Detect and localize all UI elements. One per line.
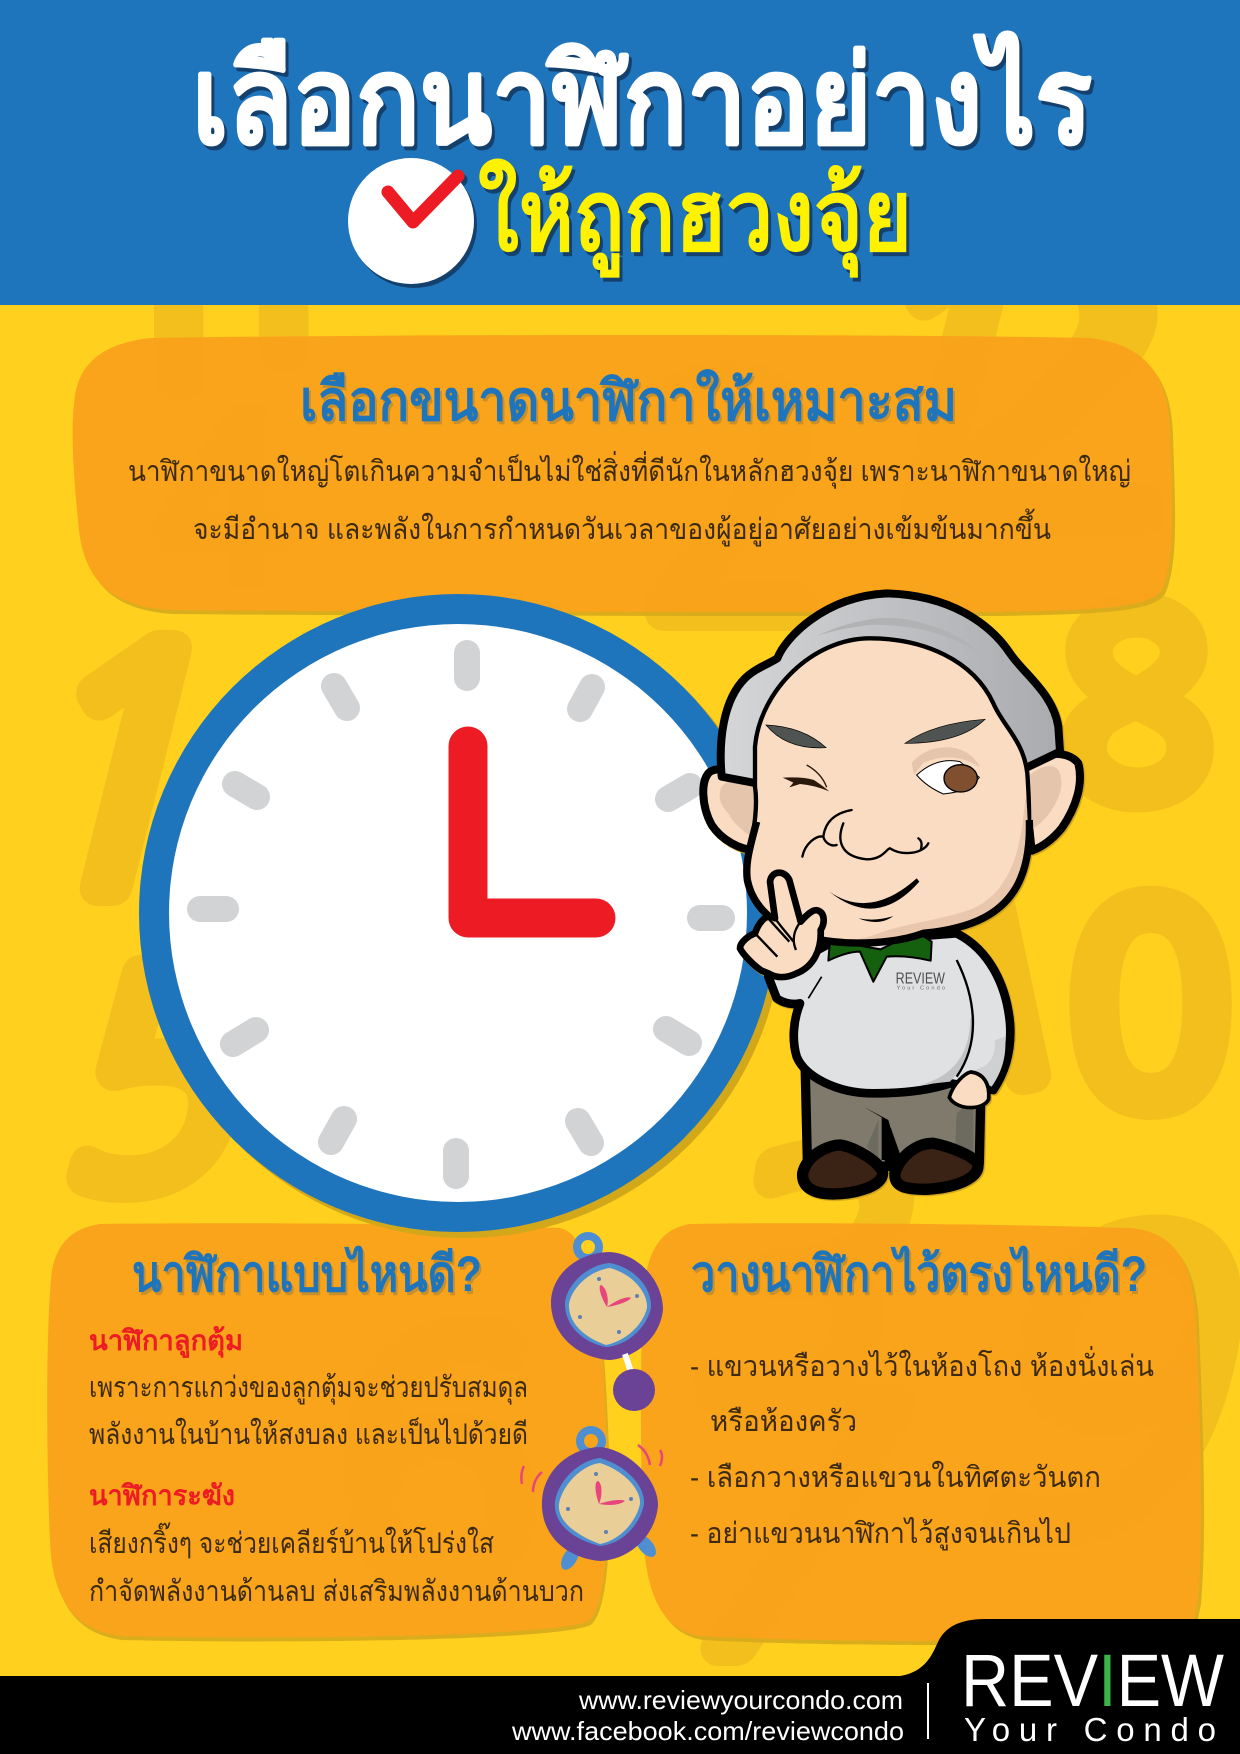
eyebrows	[766, 719, 985, 748]
background numerals: 2	[640, 342, 834, 662]
footer website links: www.reviewyourcondo.com	[578, 1685, 903, 1715]
list: placement tips: - แขวนหรือวางไว้ในห้องโถง ห้องนั่งเล่น	[690, 1346, 1154, 1383]
list: placement tips: - เลือกวางหรือแขวนในทิศตะวันตก	[690, 1460, 1101, 1494]
collar	[828, 932, 932, 982]
title line one: เลือกนาฬิกาอย่างไร	[192, 32, 1092, 169]
text block: choose size	[128, 451, 1131, 547]
list: placement tips: หรือห้องครัว	[710, 1406, 857, 1438]
footer website links: www.facebook.com/reviewcondo	[511, 1716, 904, 1746]
clock ticks	[200, 653, 722, 1176]
clock hands	[468, 746, 596, 918]
panel: where to place	[641, 1223, 1201, 1641]
nose	[802, 810, 928, 859]
background numerals: 9	[960, 1188, 1240, 1588]
background numerals: 7	[660, 1359, 904, 1699]
shoes	[803, 1143, 978, 1194]
background numerals: 1	[0, 608, 195, 938]
logo: Review Your Condo: Your Condo	[964, 1711, 1216, 1748]
icon: clock check mark	[348, 158, 474, 284]
background numerals: 6	[335, 1294, 541, 1634]
right ear	[1023, 754, 1080, 851]
panel: choose size	[73, 335, 1172, 612]
chin outline	[747, 820, 1029, 943]
face	[747, 638, 1029, 943]
hair	[721, 593, 1060, 783]
icon: pendulum wall clock	[551, 1236, 663, 1411]
background numerals: 2	[890, 204, 1193, 574]
text block: choose size: จะมีอำนาจ และพลังในการกำหนดวันเวลาของผู้อยู่อาศัยอย่างเข้มข้นมากขึ้น	[193, 508, 1051, 547]
background numerals: 1	[907, 864, 1100, 1129]
background numerals: 3	[680, 1118, 907, 1448]
resting hand	[949, 1072, 989, 1108]
background numerals: 1	[85, 146, 255, 426]
background numerals: 5	[50, 937, 249, 1227]
pointing hand	[740, 873, 824, 977]
legs	[805, 1060, 981, 1167]
heading: where to place: วางนาฬิกาไว้ตรงไหนดี?	[691, 1245, 1147, 1302]
icon: alarm clock	[521, 1430, 662, 1573]
mouth	[829, 878, 919, 922]
panel: which clock	[47, 1223, 608, 1637]
header band	[0, 0, 1240, 305]
shirt logo	[896, 970, 945, 991]
title line two: ให้ถูกฮวงจุ้ย	[478, 158, 912, 278]
hair highlight	[817, 618, 978, 652]
text block: pendulum clock: พลังงานในบ้านให้สงบลง และเป็นไปด้วยดี	[89, 1416, 528, 1451]
list: placement tips: - อย่าแขวนนาฬิกาไว้สูงจนเกินไป	[690, 1516, 1071, 1551]
background numerals: 4	[160, 396, 287, 606]
heading: choose size: เลือกขนาดนาฬิกาให้เหมาะสม	[300, 368, 957, 432]
text block: chime clock: เสียงกริ๊งๆ จะช่วยเคลียร์บ้านให้โปร่งใส	[89, 1522, 494, 1560]
left ear	[703, 769, 758, 850]
background numerals: 1	[820, 208, 1020, 538]
background numerals: 8	[1060, 581, 1212, 831]
footer band	[0, 1619, 1240, 1754]
subheading: chime clock: นาฬิการะฆัง	[89, 1480, 235, 1511]
background numerals: 0	[1068, 872, 1232, 1142]
wink eye	[783, 765, 829, 791]
big clock	[139, 594, 783, 1238]
text block: chime clock: กำจัดพลังงานด้านลบ ส่งเสริมพลังงานด้านบวก	[89, 1576, 584, 1608]
heading: which clock: นาฬิกาแบบไหนดี?	[132, 1245, 482, 1302]
text block: pendulum clock: เพราะการแกว่งของลูกตุ้มจะช่วยปรับสมดุล	[89, 1372, 528, 1405]
subheading: pendulum clock: นาฬิกาลูกตุ้ม	[89, 1325, 243, 1358]
shirt logo: Your Condo	[897, 985, 945, 991]
text block: choose size: นาฬิกาขนาดใหญ่โตเกินความจำเป็นไม่ใช่สิ่งที่ดีนักในหลักฮวงจุ้ย เพราะนาฬิกาขนาดใหญ่	[128, 451, 1131, 489]
shirt shading and folds	[808, 960, 1005, 1087]
torso	[768, 933, 1010, 1093]
text block: chime clock	[89, 1522, 584, 1608]
text block: pendulum clock	[89, 1372, 528, 1451]
logo: Review Your Condo: REVIEW	[961, 1639, 1224, 1722]
shirt logo: REVIEW	[896, 970, 945, 987]
background numerals: 1	[190, 118, 360, 398]
footer website links	[511, 1685, 904, 1746]
open eye	[912, 747, 980, 794]
character: old man mascot	[703, 593, 1080, 1194]
face shading	[830, 797, 1028, 942]
list: placement tips	[690, 1346, 1154, 1551]
